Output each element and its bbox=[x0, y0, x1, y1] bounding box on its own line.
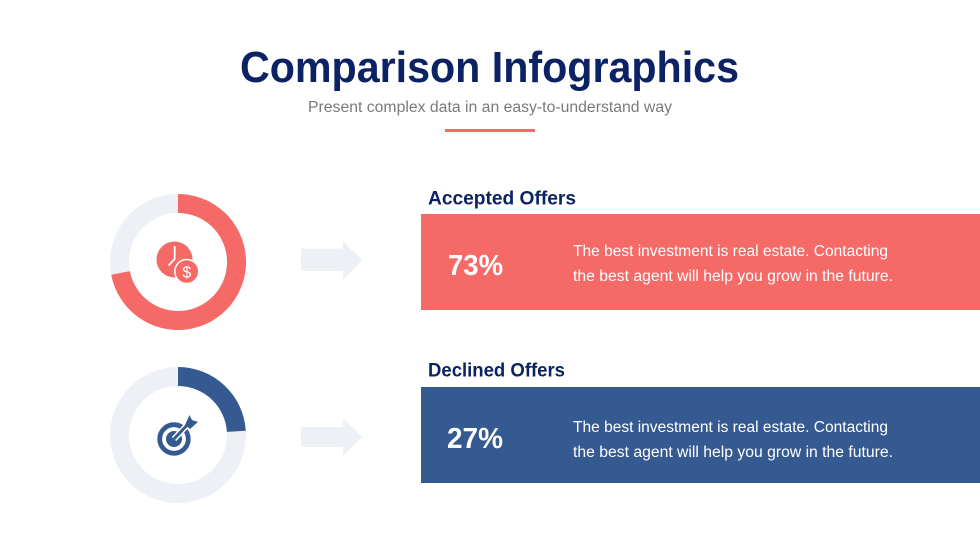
description: accepted: the best agent will help you grow in the future. bbox=[573, 268, 893, 285]
donut chart: declined 27% bbox=[120, 367, 246, 494]
icon: target with dart bbox=[160, 415, 198, 453]
panel: declined offers bbox=[421, 387, 980, 483]
subtitle: Present complex data in an easy-to-understand way bbox=[308, 99, 672, 116]
title: Comparison Infographics bbox=[240, 43, 739, 92]
description: declined: the best agent will help you grow in the future. bbox=[573, 444, 893, 461]
percentage: 27%: 27% bbox=[447, 423, 503, 455]
description: accepted: The best investment is real estate. Contacting bbox=[573, 243, 888, 260]
panel: accepted offers bbox=[421, 214, 980, 310]
heading: declined offers: Declined Offers bbox=[428, 360, 565, 382]
description: declined: The best investment is real estate. Contacting bbox=[573, 419, 888, 436]
arrow: accepted bbox=[301, 242, 362, 280]
icon: clock with dollar coin bbox=[156, 242, 199, 284]
title underline bbox=[445, 129, 535, 132]
arrow: declined bbox=[301, 418, 362, 456]
heading: accepted offers: Accepted Offers bbox=[428, 188, 576, 210]
donut chart: accepted 73% bbox=[111, 194, 246, 330]
percentage: 73%: 73% bbox=[448, 250, 503, 282]
icon: clock with dollar coin: $ bbox=[182, 264, 191, 281]
